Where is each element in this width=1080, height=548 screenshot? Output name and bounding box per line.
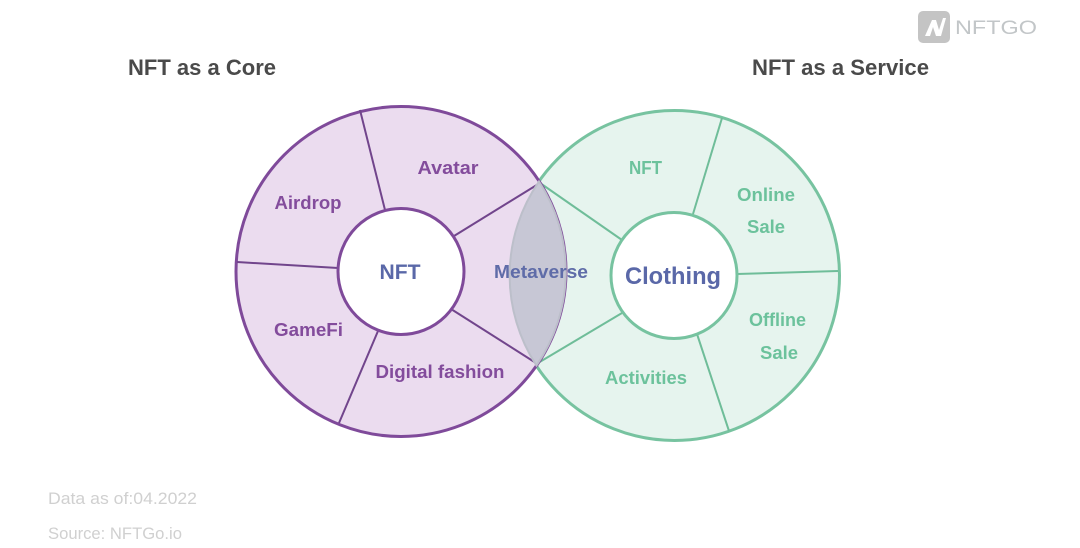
logo: NFTGo: NFTGO <box>955 18 1037 39</box>
inner circle: NFT <box>338 208 464 334</box>
label: Digital fashion: Digital fashion <box>376 362 504 382</box>
inner circle: NFT: NFT <box>380 261 421 284</box>
label: NFT: NFT <box>629 158 662 178</box>
label: Offline Sale: Sale <box>760 343 798 363</box>
footnote: source: Source: NFTGo.io <box>48 524 182 543</box>
label: Activities: Activities <box>605 368 687 388</box>
footnote: date: Data as of:04.2022 <box>48 489 197 508</box>
logo: NFTGo <box>918 11 1037 43</box>
label: Offline Sale: Offline <box>749 310 806 330</box>
panel: right circle, NFT as a Service <box>510 110 840 440</box>
label: Metaverse: Metaverse <box>494 262 588 282</box>
label: Online Sale <box>737 185 795 237</box>
heading: NFT as a Service: NFT as a Service <box>752 55 929 80</box>
label: GameFi: GameFi <box>274 320 343 340</box>
heading: NFT as a Core: NFT as a Core <box>128 55 276 80</box>
label: Online Sale: Online <box>737 185 795 205</box>
panel: left circle, NFT as a Core <box>236 106 566 436</box>
overlap: lens <box>510 182 566 366</box>
label: Airdrop: Airdrop <box>274 193 342 213</box>
inner circle: Clothing <box>611 212 737 338</box>
label: Avatar: Avatar <box>418 158 478 178</box>
label: Online Sale: Sale <box>747 217 785 237</box>
label: Offline Sale <box>749 310 806 363</box>
inner circle: Clothing: Clothing <box>625 263 721 290</box>
